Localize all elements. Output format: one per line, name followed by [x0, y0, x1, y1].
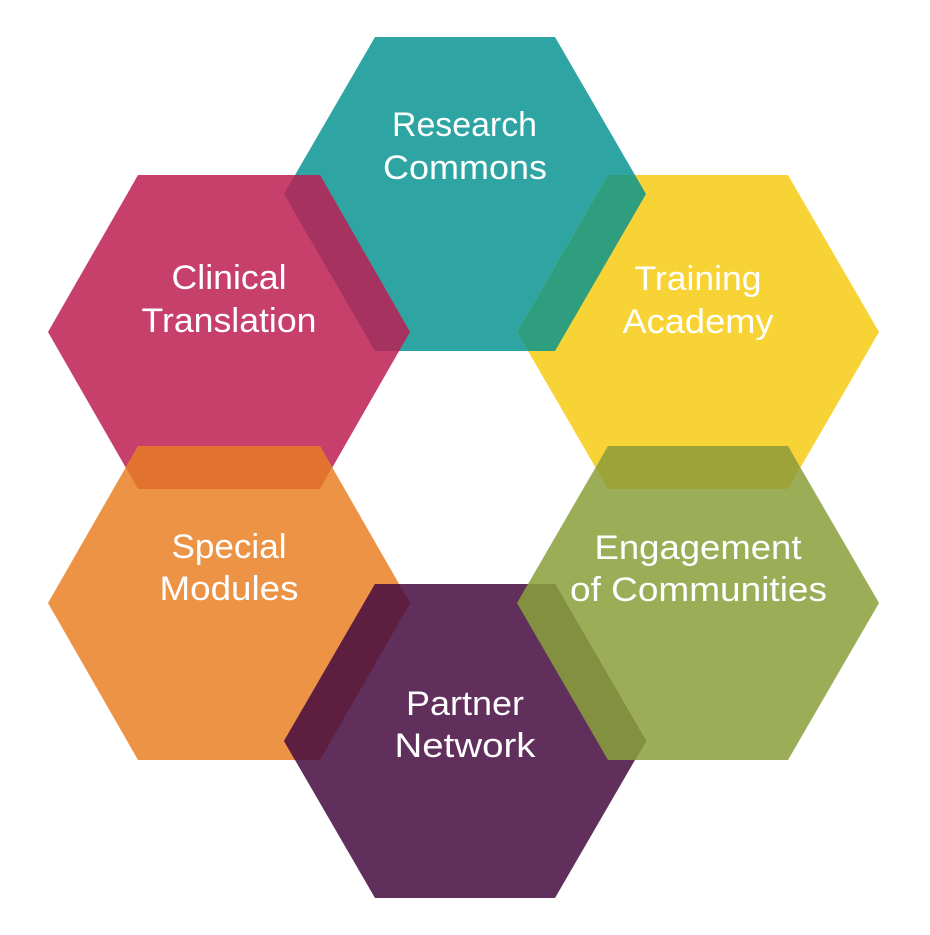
hexagon: Special Modules: Modules — [160, 570, 298, 608]
hexagon: Partner Network — [284, 584, 646, 898]
hexagon: Training Academy — [517, 175, 879, 489]
hexagon: Engagement of Communities: Engagement — [594, 529, 802, 567]
hexagon: Engagement of Communities — [517, 446, 879, 760]
overlap: Research and Clinical — [284, 175, 410, 351]
overlap: Training and Engagement — [596, 446, 800, 489]
hexagon: Partner Network: Partner — [406, 685, 524, 723]
hexagon: Research Commons: Commons — [383, 149, 547, 187]
hexagon: Clinical Translation — [48, 175, 410, 489]
hexagon: Partner Network: Network — [394, 727, 536, 765]
hexagon: Research Commons: Research — [392, 106, 537, 144]
hexagon: Clinical Translation: Translation — [142, 302, 316, 340]
hexagon: Training Academy: Academy — [622, 303, 774, 341]
hexagon: Engagement of Communities: of Communities — [570, 571, 827, 609]
overlap: Engagement and Partner — [517, 584, 646, 760]
hexagon: Training Academy: Training — [634, 260, 762, 298]
hexagon: Special Modules — [48, 446, 410, 760]
overlap: Special and Partner — [284, 584, 410, 760]
overlap: Clinical and Special — [126, 446, 332, 489]
hexagon: Clinical Translation: Clinical — [172, 259, 286, 297]
hexagon: Special Modules: Special — [172, 528, 286, 566]
hexagon: Research Commons — [284, 37, 646, 351]
overlap: Research and Training — [517, 175, 646, 351]
